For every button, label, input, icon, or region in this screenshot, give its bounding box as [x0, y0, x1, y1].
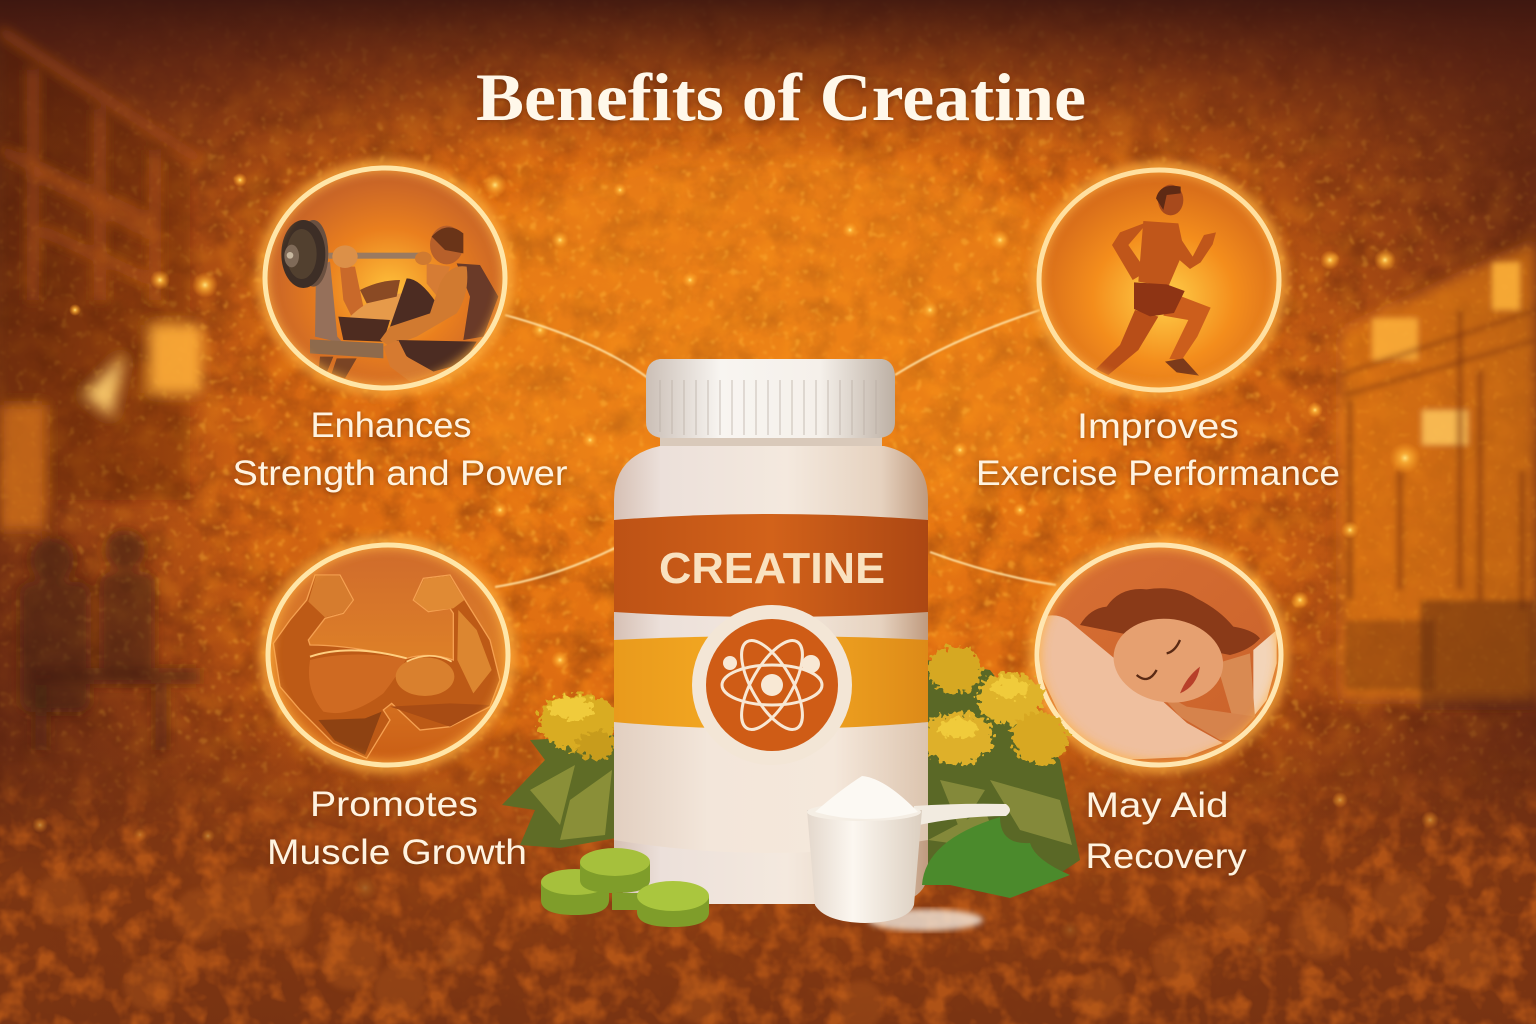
- icon: sleeping woman: [1080, 588, 1277, 740]
- label: promotes muscle growth: Muscle Growth: [267, 833, 527, 872]
- lower label panel: [614, 722, 928, 853]
- icon: pillow: [1040, 615, 1223, 760]
- icon: running figure: [1096, 185, 1216, 376]
- circle: recovery: [1035, 543, 1283, 767]
- supplement jar: [614, 359, 928, 904]
- circle: strength and power: [263, 166, 507, 390]
- blurred gym interior, left: [0, 30, 202, 750]
- icon: flexing muscular torso: [273, 575, 500, 758]
- orange label band: [614, 514, 928, 617]
- central glow: [410, 150, 1130, 530]
- icon: weight bench and barbell: [281, 220, 420, 378]
- icon: spotter: [380, 226, 498, 382]
- green leaves beside scoop: [922, 817, 1070, 898]
- connector lines: [495, 310, 1056, 587]
- powder pile: [867, 909, 983, 931]
- label: promotes muscle growth: Promotes: [310, 785, 478, 824]
- plants: left foliage and yellow flowers: [502, 694, 618, 848]
- soft glow texture: [4, 80, 1533, 811]
- jar body: [614, 446, 928, 904]
- label: may aid recovery: Recovery: [1086, 837, 1247, 876]
- circle: exercise performance: [1037, 168, 1281, 392]
- blurred gym interior, right: [1340, 240, 1536, 710]
- ground bushes: [0, 720, 1536, 1024]
- jar lid: [646, 359, 895, 438]
- label: improves exercise performance: Improves: [1077, 407, 1239, 446]
- icon: lifter on bench: [332, 245, 407, 342]
- product name: CREATINE: [659, 544, 885, 593]
- green tablets: [541, 848, 709, 927]
- label: enhances strength and power: Strength and Power: [232, 454, 568, 493]
- circle: muscle growth: [266, 543, 510, 767]
- plants: right foliage and yellow flowers: [923, 646, 1080, 880]
- title: Benefits of Creatine: [476, 59, 1086, 135]
- jar neck: [660, 430, 882, 460]
- label: improves exercise performance: Exercise Performance: [976, 454, 1340, 493]
- icon: atom badge: [692, 605, 852, 765]
- yellow label band: [614, 636, 928, 729]
- measuring scoop with powder: [807, 776, 1010, 923]
- label: may aid recovery: May Aid: [1086, 786, 1228, 825]
- label: enhances strength and power: Enhances: [310, 406, 472, 445]
- glowing bokeh dots: [32, 173, 1439, 968]
